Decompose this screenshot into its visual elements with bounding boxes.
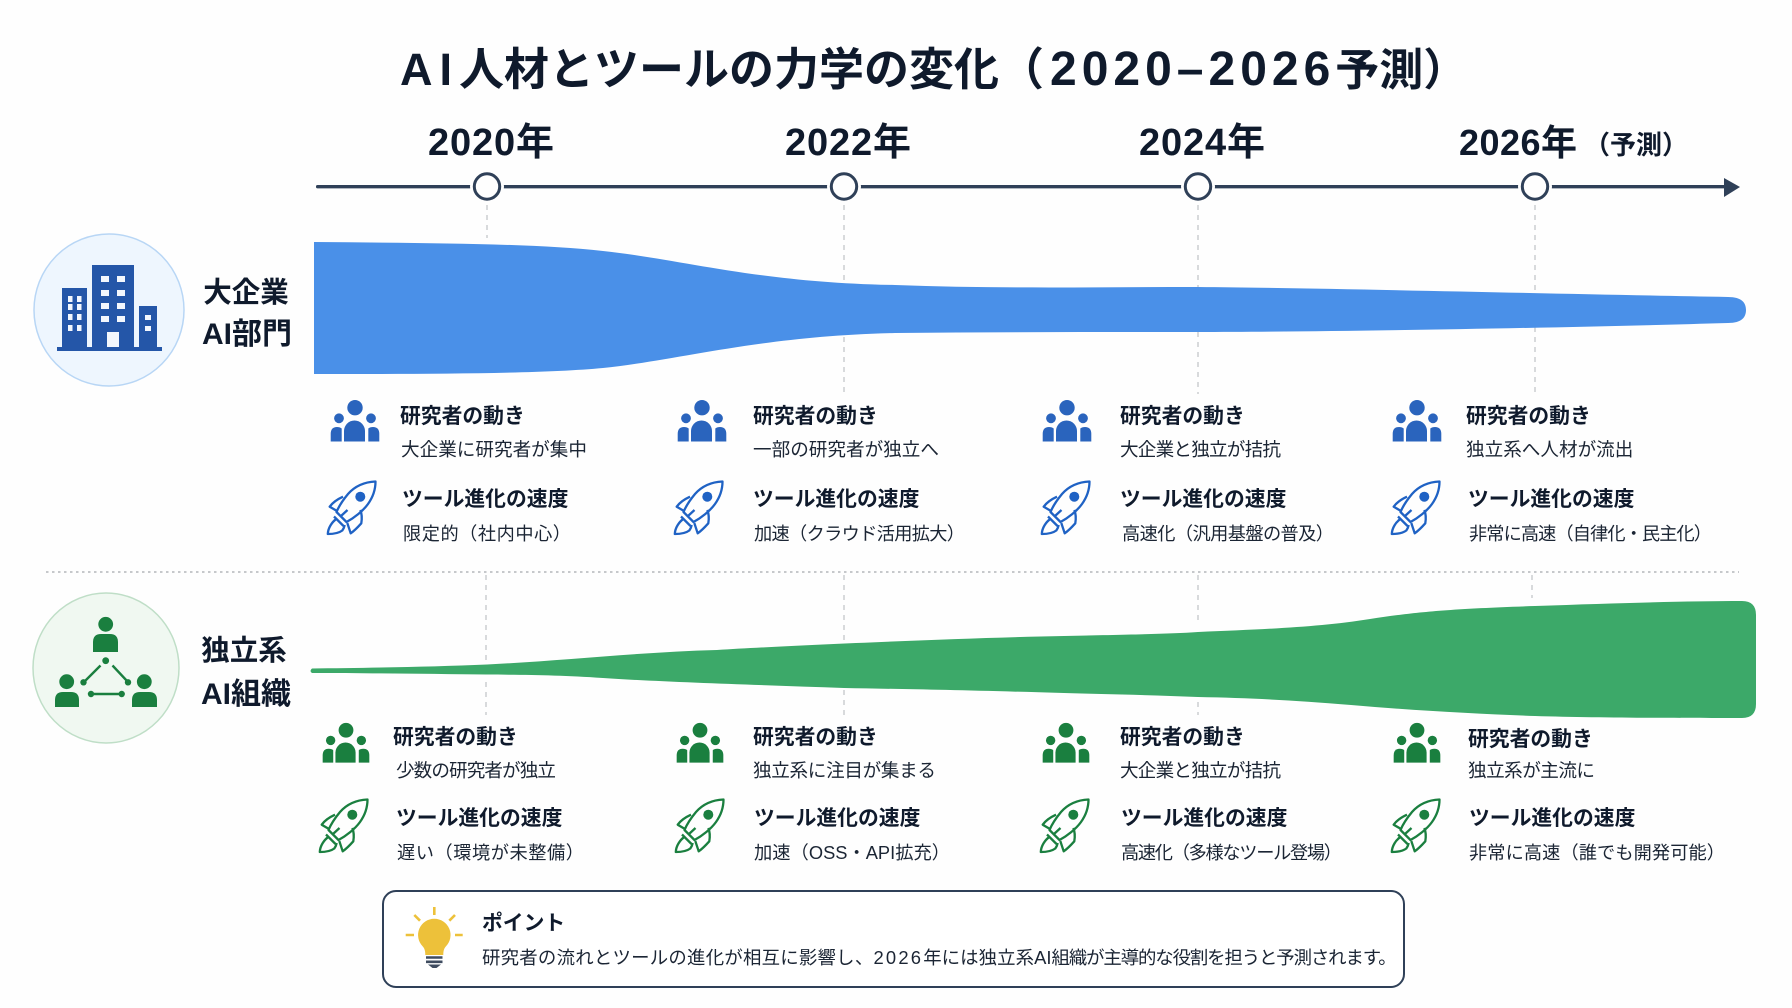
tool text: [1469, 807, 1725, 863]
year label: 2024: 2024年: [1139, 122, 1265, 164]
blue items: 2026: [1392, 400, 1712, 544]
icon: rocket: [328, 482, 376, 534]
label: 独立系 AI組織: AI組織: [201, 678, 291, 711]
icon: researchers: [1394, 723, 1440, 763]
researcher text: 大企業と独立が拮抗: [1120, 760, 1281, 781]
green items: 2026: [1392, 723, 1725, 863]
researcher text: [1466, 405, 1633, 460]
researcher text: [393, 726, 556, 781]
blue items: 2022: [675, 400, 965, 544]
blue items: 2024: [1042, 400, 1334, 544]
year label: 2026 forecast: [1459, 122, 1688, 163]
icon: researchers: [323, 723, 369, 763]
tool text: [1120, 488, 1334, 544]
icon: rocket: [1392, 800, 1440, 852]
year label: 2020: 2020年: [428, 122, 554, 164]
callout text: 研究者の流れとツールの進化が相互に影響し、2026年には独立系AI組織が主導的な役割を担うと予測されます。: [482, 947, 1396, 968]
icon: connected people: [33, 593, 179, 743]
title: AI人材とツールの力学の変化（2020–2026予測）: [400, 43, 1467, 96]
callout: point: [383, 891, 1404, 987]
icon: researchers: [1043, 723, 1089, 763]
green items: 2024: [1041, 723, 1342, 863]
researcher text: [753, 726, 936, 781]
researcher text: 少数の研究者が独立: [396, 760, 556, 781]
researcher text: 大企業に研究者が集中: [401, 439, 587, 460]
researcher text: 研究者の動き: [753, 405, 878, 428]
tool text: 加速（OSS・API拡充）: [754, 842, 950, 863]
row header: large company: [34, 234, 292, 386]
researcher text: [753, 405, 939, 460]
researcher text: 独立系に注目が集まる: [753, 760, 936, 781]
tool text: 高速化（汎用基盤の普及）: [1122, 524, 1334, 544]
icon: light bulb: [406, 907, 463, 968]
year label: 2022: 2022年: [785, 122, 911, 164]
row header: independent: [33, 593, 291, 743]
tool text: 遅い（環境が未整備）: [397, 843, 584, 863]
researcher text: 研究者の動き: [393, 726, 518, 749]
icon: rocket: [675, 482, 722, 534]
year label: 2026 forecast: （予測）: [1584, 130, 1688, 160]
tool text: [1121, 807, 1342, 863]
icon: rocket: [676, 800, 724, 852]
researcher text: 研究者の動き: [1120, 726, 1245, 749]
researcher text: 研究者の動き: [1120, 405, 1245, 428]
researcher text: [400, 405, 587, 460]
icon: researchers: [1043, 400, 1091, 442]
tool text: 限定的（社内中心）: [403, 524, 571, 544]
timeline: [316, 122, 1740, 204]
tool text: ツール進化の速度: [1469, 807, 1636, 830]
blue items: 2020: [328, 400, 587, 544]
icon: office buildings: [34, 234, 184, 386]
tool text: [402, 488, 571, 544]
icon: rocket: [1042, 482, 1090, 534]
researcher text: 研究者の動き: [400, 405, 525, 428]
label: 大企業 AI部門: 大企業: [203, 277, 289, 309]
tool text: 高速化（多様なツール登場）: [1121, 843, 1342, 863]
label: 大企業 AI部門: [202, 277, 292, 351]
tool text: ツール進化の速度: [753, 488, 920, 511]
label: 独立系 AI組織: [201, 635, 291, 711]
researcher text: 研究者の動き: [753, 726, 878, 749]
researcher text: [1120, 405, 1281, 460]
researcher text: 大企業と独立が拮抗: [1120, 439, 1281, 460]
researcher text: 独立系が主流に: [1468, 760, 1595, 781]
tool text: [396, 807, 584, 863]
tool text: ツール進化の速度: [1121, 807, 1288, 830]
icon: researchers: [331, 400, 379, 442]
label: 大企業 AI部門: AI部門: [202, 318, 292, 351]
icon: rocket: [320, 800, 368, 852]
tool text: 非常に高速（誰でも開発可能）: [1469, 843, 1725, 863]
icon: researchers: [1393, 400, 1441, 442]
tool text: ツール進化の速度: [754, 807, 921, 830]
green items: 2020: [320, 723, 584, 863]
blue band: large company researchers: [314, 242, 1746, 374]
timeline axis arrow: [316, 178, 1740, 197]
researcher text: 一部の研究者が独立へ: [753, 439, 939, 460]
green items: 2022: [676, 723, 950, 863]
tool text: [1468, 488, 1712, 544]
tool text: ツール進化の速度: [402, 488, 569, 511]
researcher text: 独立系へ人材が流出: [1466, 439, 1633, 460]
researcher text: [1120, 726, 1281, 781]
tool text: [754, 807, 950, 863]
year label: 2026 forecast: 2026年: [1459, 122, 1577, 163]
researcher text: 研究者の動き: [1466, 405, 1591, 428]
tool text: ツール進化の速度: [1120, 488, 1287, 511]
tool text: [753, 488, 965, 544]
callout heading: ポイント: [482, 912, 565, 935]
tool text: 加速（クラウド活用拡大）: [754, 524, 965, 544]
green band: independent organisations: [310, 601, 1756, 718]
researcher text: [1468, 728, 1595, 781]
label: 独立系 AI組織: 独立系: [201, 635, 287, 667]
icon: researchers: [678, 400, 726, 442]
tool text: ツール進化の速度: [1468, 488, 1635, 511]
tool text: ツール進化の速度: [396, 807, 563, 830]
tool text: 非常に高速（自律化・民主化）: [1469, 524, 1712, 544]
timeline nodes: [470, 170, 1552, 204]
icon: researchers: [677, 723, 723, 763]
icon: rocket: [1041, 800, 1088, 852]
researcher text: 研究者の動き: [1468, 728, 1593, 751]
icon: rocket: [1392, 482, 1440, 534]
